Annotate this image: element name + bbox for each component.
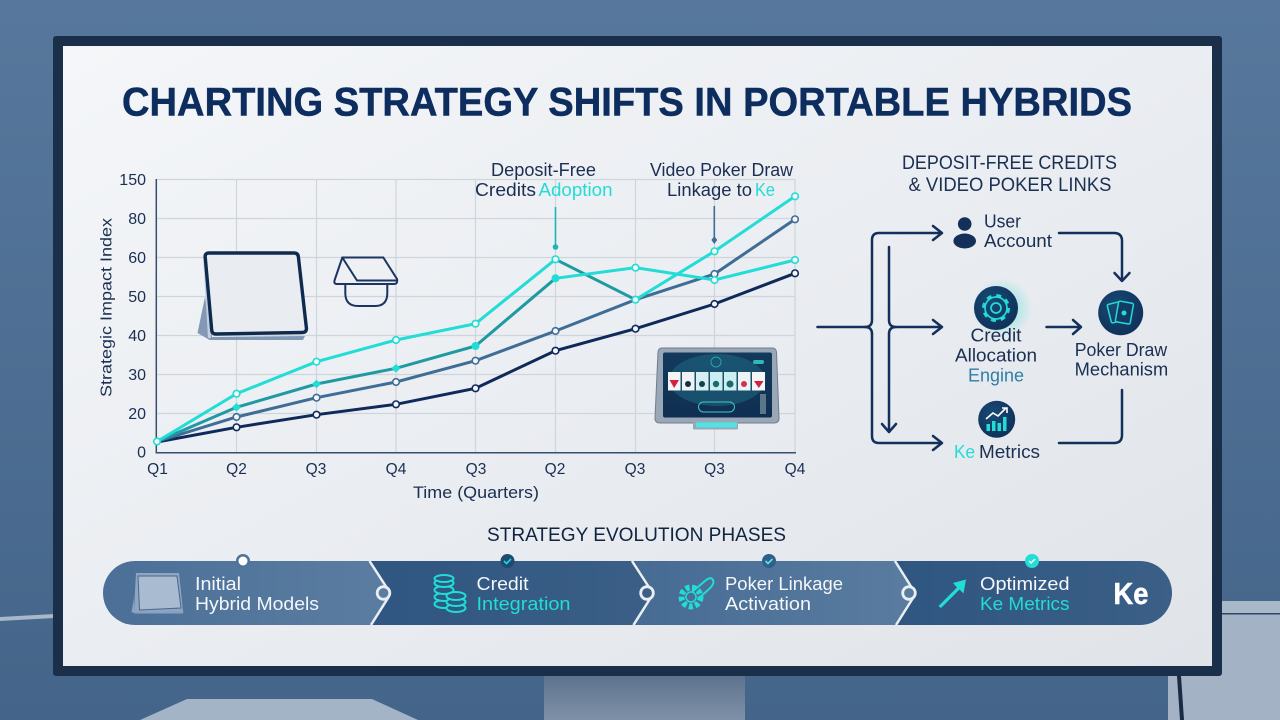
icon: gear — [972, 278, 1032, 338]
text: credit integration: Credit — [476, 574, 528, 594]
chevron separators — [370, 561, 913, 625]
y axis tick labels: 40 — [128, 328, 146, 345]
icon: video poker device — [655, 348, 779, 430]
node: credit allocation engine: Allocation — [955, 346, 1037, 366]
icon: poker linkage gear — [682, 578, 713, 606]
y axis tick labels: 150 — [119, 172, 146, 189]
icon: poker cards — [1098, 290, 1143, 335]
steel markers — [233, 216, 798, 420]
ke logo: Ke — [1114, 576, 1148, 611]
text: credit integration: Integration — [476, 594, 570, 614]
step marker 1 — [236, 554, 250, 568]
navy markers — [233, 270, 798, 431]
y axis tick labels: 80 — [128, 211, 146, 228]
background furniture right — [1168, 601, 1280, 720]
annotation: deposit-free credits adoption: Deposit-Free — [491, 160, 596, 180]
node: user account: User — [984, 212, 1021, 232]
text: initial hybrid models: Initial — [195, 574, 241, 594]
icon: hybrid laptop outline — [334, 258, 397, 306]
node: user account — [953, 212, 1052, 251]
line: teal series — [157, 259, 636, 442]
x axis tick labels: Q4 — [386, 461, 407, 478]
x axis tick labels: Q3 — [625, 461, 645, 478]
monitor stand — [544, 674, 745, 720]
x axis title: Time (Quarters) — [413, 484, 539, 502]
annotation: deposit-free credits adoption: Credits — [475, 180, 536, 200]
node: poker draw mechanism: Poker Draw — [1075, 340, 1168, 360]
node: credit allocation engine — [955, 278, 1037, 386]
text: poker linkage activation: Poker Linkage — [725, 574, 843, 594]
text: optimized ke metrics — [980, 574, 1070, 614]
x axis tick labels: Q3 — [466, 461, 486, 478]
node: ke metrics — [954, 401, 1040, 462]
annotation: video poker draw linkage: Video Poker Draw — [650, 160, 794, 180]
text: initial hybrid models — [195, 574, 319, 614]
annotation: video poker draw linkage: Ke — [755, 180, 775, 200]
flow heading: & VIDEO POKER LINKS — [908, 175, 1112, 196]
cyan markers — [154, 193, 798, 445]
monitor screen — [63, 46, 1212, 666]
y axis title: Strategic Impact Index — [98, 218, 116, 397]
teal markers — [232, 274, 560, 412]
node: ke metrics: Metrics — [979, 442, 1040, 462]
y axis tick labels: 30 — [128, 367, 146, 384]
flow heading: DEPOSIT-FREE CREDITS — [902, 153, 1117, 174]
y axis tick labels: 0 — [137, 444, 146, 462]
line: steel series — [157, 219, 795, 442]
icon: user — [953, 217, 976, 248]
annotation: deposit-free credits adoption — [475, 160, 612, 250]
x axis tick labels — [147, 461, 806, 478]
text: credit integration — [476, 574, 570, 614]
annotation: video poker draw linkage: Linkage to — [667, 180, 752, 200]
y axis tick labels — [119, 172, 146, 462]
x axis tick labels: Q2 — [226, 461, 247, 478]
title: CHARTING STRATEGY SHIFTS IN PORTABLE HYBRIDS — [122, 80, 1132, 124]
phase 3 background — [632, 561, 916, 625]
phase 1 background — [103, 561, 390, 625]
node: user account: Account — [984, 231, 1052, 251]
flow arrows — [818, 226, 1130, 450]
icon: metrics chart — [978, 401, 1015, 438]
text: poker linkage activation: Activation — [725, 594, 811, 614]
y axis tick labels: 50 — [128, 289, 146, 306]
icon: growth arrow — [938, 580, 966, 608]
text: optimized ke metrics: Optimized — [980, 574, 1070, 594]
text: initial hybrid models: Hybrid Models — [195, 594, 319, 614]
annotation: deposit-free credits adoption: Adoption — [538, 180, 612, 200]
node: poker draw mechanism — [1075, 290, 1168, 380]
monitor base — [140, 699, 418, 720]
background shelf left — [0, 614, 54, 621]
chart axes — [156, 179, 796, 453]
x axis tick labels: Q2 — [545, 461, 565, 478]
x axis tick labels: Q3 — [306, 461, 326, 478]
annotation: video poker draw linkage — [650, 160, 794, 244]
node: credit allocation engine: Credit — [970, 326, 1022, 346]
panel: line chart — [98, 172, 806, 502]
x axis tick labels: Q3 — [704, 461, 725, 478]
x axis tick labels: Q4 — [785, 461, 806, 478]
playing cards — [668, 372, 765, 390]
flow heading — [902, 153, 1117, 196]
line: navy series — [157, 273, 795, 442]
panel: strategy evolution phases — [103, 554, 1172, 625]
step marker 3 — [762, 554, 776, 568]
phase 4 background — [895, 561, 1172, 625]
y axis tick labels: 20 — [128, 406, 146, 423]
step marker 2 — [500, 554, 514, 568]
node: ke metrics: Ke — [954, 442, 975, 462]
x axis tick labels: Q1 — [147, 461, 168, 478]
node: credit allocation engine: Engine — [968, 366, 1024, 386]
step marker 4 — [1025, 554, 1039, 568]
phase 2 background — [370, 561, 653, 625]
icon: tablet — [132, 573, 184, 614]
line: bright cyan series — [157, 196, 795, 442]
text: optimized ke metrics: Ke Metrics — [980, 594, 1070, 614]
phases heading: STRATEGY EVOLUTION PHASES — [487, 524, 786, 546]
text: poker linkage activation — [725, 574, 843, 614]
icon: coins — [434, 575, 466, 612]
y axis tick labels: 60 — [128, 250, 146, 267]
node: poker draw mechanism: Mechanism — [1075, 360, 1168, 380]
icon: tablet on stand — [198, 252, 306, 340]
